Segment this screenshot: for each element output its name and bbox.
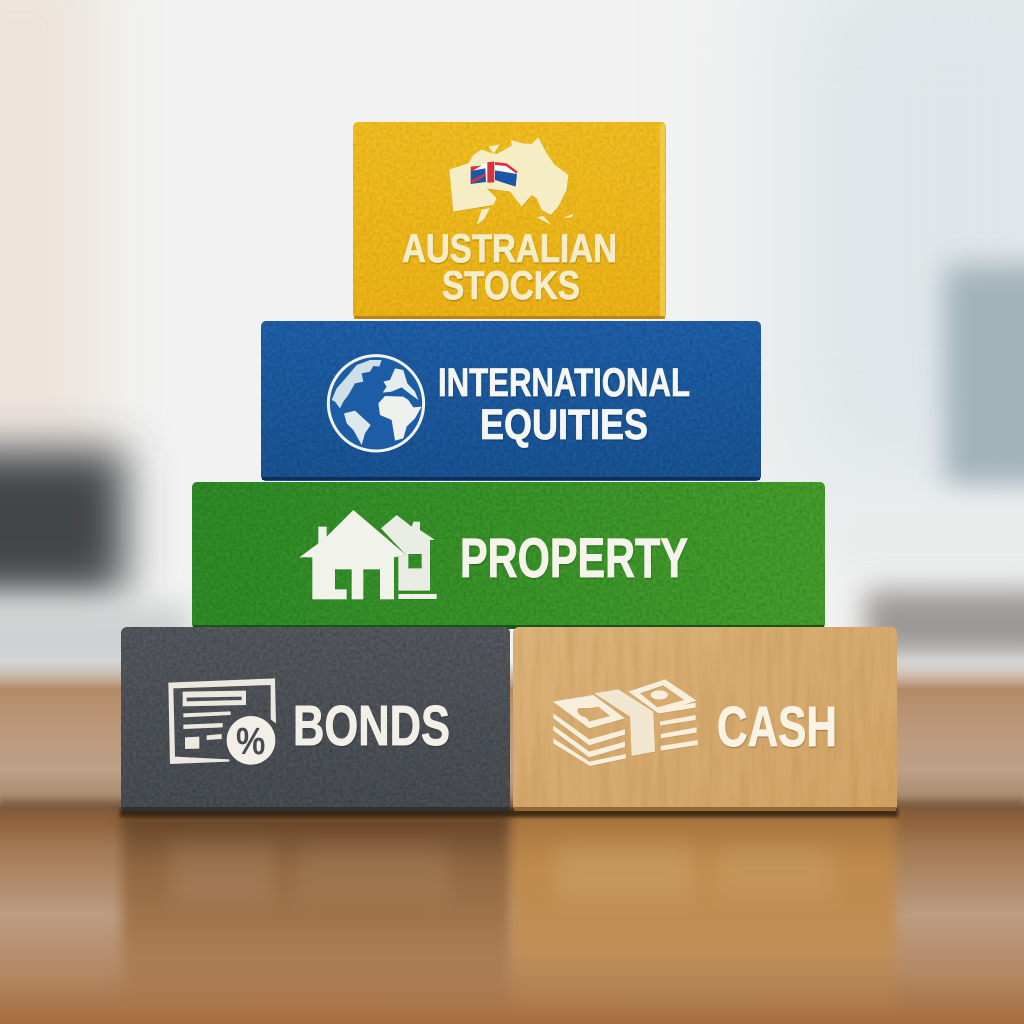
label: Cash: CASH [717,695,837,759]
block: Property [192,482,825,629]
label: Australian stocks: AUSTRALIAN [402,227,617,271]
label: Bonds: BONDS [293,694,450,758]
icon: percent sign: % [236,720,265,763]
label: Property: PROPERTY [460,526,688,589]
label: Australian stocks [402,227,617,308]
label: Australian stocks: STOCKS [442,264,580,308]
reflection under bonds block [116,816,514,988]
block: International equities [261,321,761,481]
block: Australian stocks [353,122,666,319]
icon: bond certificate with percent [168,678,276,765]
label: International equities: INTERNATIONAL [438,361,690,405]
icon: houses [299,510,437,599]
reflection under cash block [506,816,902,982]
label: International equities [438,361,690,449]
icon: Australia map with flag [449,137,573,225]
icon: globe [328,356,424,451]
block: Bonds [121,627,510,811]
blurred room background [0,0,1024,720]
block: Cash [513,627,897,811]
icon: stack of cash [553,679,698,766]
wooden table surface [0,660,1024,1024]
label: International equities: EQUITIES [480,401,648,449]
icon: flag [471,161,518,187]
